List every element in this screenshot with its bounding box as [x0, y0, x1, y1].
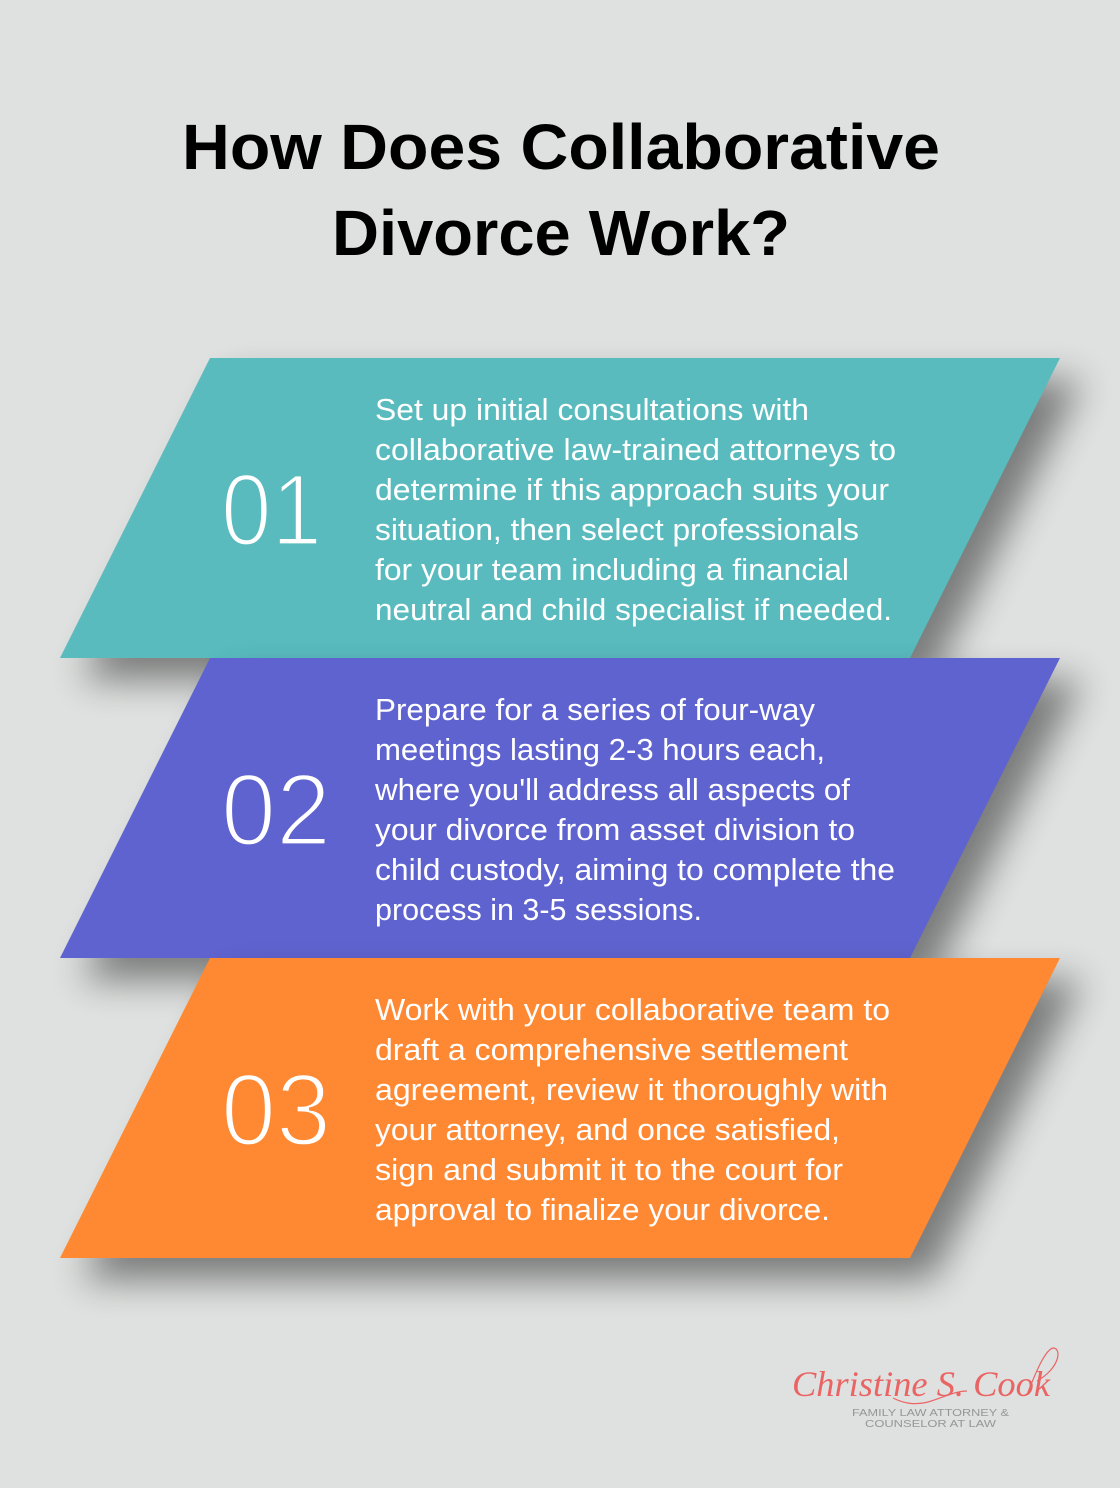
step 2 text: your divorce from asset division to — [375, 812, 855, 847]
step 2 text: where you'll address all aspects of — [374, 772, 850, 807]
panel: step 3 — [60, 958, 1082, 1280]
step 3 text: draft a comprehensive settlement — [375, 1032, 848, 1067]
step 1 text: Set up initial consultations with — [375, 392, 809, 427]
panel: step 1 — [60, 358, 1082, 680]
step 2 text: Prepare for a series of four-way — [375, 692, 816, 727]
step 3 text: Work with your collaborative team to — [375, 992, 890, 1027]
step 1 text: for your team including a financial — [375, 552, 849, 587]
step 1 text: neutral and child specialist if needed. — [375, 592, 892, 627]
title: Divorce Work? — [332, 197, 790, 269]
step 1 text: collaborative law-trained attorneys to — [375, 432, 896, 467]
step 1 text: situation, then select professionals — [375, 512, 859, 547]
logo: Christine S. Cook — [792, 1348, 1058, 1430]
title: How Does Collaborative — [182, 111, 940, 183]
step 2 parallelogram — [60, 658, 1060, 958]
title — [182, 111, 940, 269]
step 2 text: process in 3-5 sessions. — [375, 892, 702, 927]
step 3 text — [375, 992, 890, 1227]
step 3 text: sign and submit it to the court for — [375, 1152, 843, 1187]
step 2 text: child custody, aiming to complete the — [375, 852, 895, 887]
panel: step 2 — [60, 658, 1082, 980]
logo: Christine S. Cook: COUNSELOR AT LAW — [865, 1418, 996, 1430]
step 3 number: 03 — [221, 1053, 331, 1167]
step 3 text: approval to finalize your divorce. — [375, 1192, 830, 1227]
step 2 number: 02 — [221, 753, 331, 867]
step 1 parallelogram — [60, 358, 1060, 658]
step 1 text: determine if this approach suits your — [375, 472, 889, 507]
step 1 text — [375, 392, 896, 627]
step 2 text: meetings lasting 2-3 hours each, — [375, 732, 825, 767]
step 1 number: 01 — [221, 453, 322, 567]
logo: Christine S. Cook: Christine S. Cook — [792, 1364, 1051, 1404]
logo: Christine S. Cook: FAMILY LAW ATTORNEY & — [852, 1407, 1009, 1419]
step 3 parallelogram — [60, 958, 1060, 1258]
step 2 text — [374, 692, 895, 927]
step 3 text: agreement, review it thoroughly with — [375, 1072, 888, 1107]
step 3 text: your attorney, and once satisfied, — [375, 1112, 840, 1147]
